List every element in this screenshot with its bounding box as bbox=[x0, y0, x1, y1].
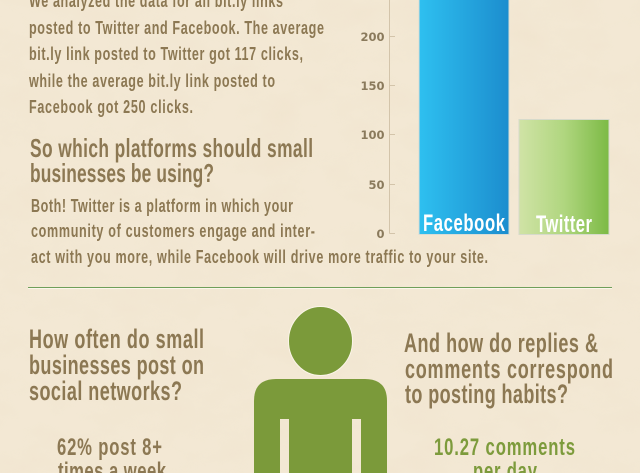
text block: platform recommendation: Both! Twitter is a platform in which your bbox=[31, 197, 293, 217]
heading: how often do businesses post: social networks? bbox=[29, 375, 182, 406]
bar: Facebook bbox=[419, 0, 509, 237]
statistic: comments per day: 10.27 comments bbox=[434, 434, 575, 461]
statistic: comments per day bbox=[434, 434, 575, 473]
heading: replies and comments bbox=[404, 327, 613, 409]
bar: Twitter bbox=[519, 120, 609, 238]
bar chart: average clicks per link bbox=[360, 0, 609, 241]
text block: bit.ly click analysis: Facebook got 250 clicks. bbox=[29, 98, 193, 118]
icon: person bbox=[254, 306, 387, 473]
heading: which platforms bbox=[30, 134, 313, 188]
heading: how often do businesses post bbox=[29, 323, 204, 406]
text block: platform recommendation bbox=[31, 197, 488, 268]
text block: bit.ly click analysis bbox=[28, 0, 324, 118]
person head bbox=[288, 306, 352, 376]
axis labels: 100 bbox=[360, 128, 384, 142]
heading: how often do businesses post: businesses post on bbox=[29, 349, 204, 380]
heading: how often do businesses post: How often do small bbox=[29, 323, 204, 354]
text block: bit.ly click analysis: while the average bit.ly link posted to bbox=[28, 72, 275, 92]
chart axis bbox=[390, 0, 395, 234]
bar: Facebook: Facebook bbox=[423, 210, 505, 237]
axis labels: 0 bbox=[376, 227, 384, 241]
heading: replies and comments: comments correspond bbox=[405, 353, 613, 384]
axis labels bbox=[360, 30, 384, 241]
axis labels: 200 bbox=[360, 30, 384, 44]
heading: replies and comments: And how do replies & bbox=[404, 327, 598, 358]
heading: which platforms: So which platforms should small bbox=[30, 134, 313, 163]
heading: which platforms: businesses be using? bbox=[30, 159, 214, 188]
statistic: posting frequency bbox=[57, 434, 166, 473]
person body bbox=[254, 379, 387, 473]
axis labels: 150 bbox=[360, 79, 384, 93]
statistic: posting frequency: 62% post 8+ bbox=[57, 434, 162, 461]
text block: bit.ly click analysis: bit.ly link posted to Twitter got 117 clicks, bbox=[29, 45, 303, 65]
text block: bit.ly click analysis: posted to Twitter and Facebook. The average bbox=[29, 19, 324, 39]
bar: Twitter: Twitter bbox=[536, 211, 592, 238]
text block: platform recommendation: act with you more, while Facebook will drive more traffic to your site. bbox=[31, 248, 488, 268]
heading: replies and comments: to posting habits? bbox=[405, 378, 568, 409]
axis labels: 50 bbox=[368, 178, 384, 192]
text block: platform recommendation: community of customers engage and inter- bbox=[31, 222, 315, 242]
section divider bbox=[28, 287, 612, 289]
